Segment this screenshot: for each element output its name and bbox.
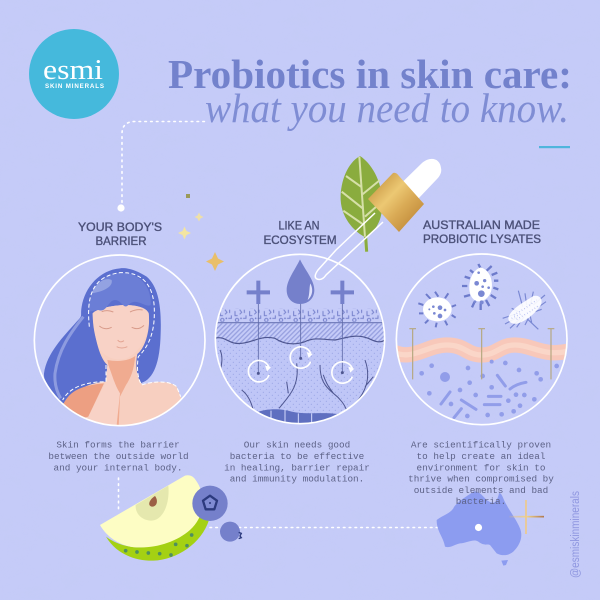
- rod bacteria: [441, 375, 526, 418]
- apple skin dots: [124, 533, 193, 557]
- small blueberry: [220, 522, 240, 542]
- text: barrier description: between the outside world: [48, 451, 189, 462]
- vertical lines: [258, 293, 342, 373]
- hand: [88, 364, 120, 424]
- text: ecosystem description: [224, 440, 370, 484]
- text: lysates description: bacteria.: [456, 496, 506, 507]
- circle outline: [396, 254, 567, 425]
- dropper glass tube: [315, 213, 383, 280]
- text: lysates description: environment for skin to: [417, 462, 545, 473]
- barrier dashes: [63, 273, 181, 400]
- headings: LIKE AN: [278, 220, 320, 232]
- headings: AUSTRALIAN MADE: [423, 219, 540, 232]
- text: lysates description: outside elements and bad: [414, 485, 548, 496]
- drop icon: [287, 259, 314, 304]
- social handle: @esmiskinminerals: [570, 491, 582, 578]
- connector: dotted line from apple to Australia: [118, 478, 478, 528]
- text: barrier description: Skin forms the barrier: [56, 440, 180, 450]
- title: [168, 51, 572, 131]
- ring arrows and nodes: [257, 352, 354, 375]
- fringe: [88, 273, 151, 312]
- leaf veins: [342, 157, 380, 252]
- icon: Australia map: [437, 491, 544, 566]
- text: barrier description: and your internal body.: [54, 462, 182, 473]
- title: what you need to know.: [205, 85, 569, 131]
- plus icons: [247, 281, 354, 304]
- panel: probiotic lysates: [390, 254, 573, 425]
- leaf stem: [366, 237, 367, 252]
- headings: BARRIER: [96, 235, 146, 248]
- hair: [44, 268, 161, 403]
- headings: PROBIOTIC LYSATES: [423, 233, 541, 246]
- skin: [84, 305, 182, 425]
- logo: esmi skin minerals: [29, 29, 119, 119]
- circle outline: [215, 254, 385, 424]
- shoulder shadow: [63, 383, 104, 420]
- large blueberry: [192, 486, 228, 521]
- bacterium 2: [462, 264, 498, 310]
- hatched layer: [215, 323, 385, 344]
- nerve branches: [220, 350, 373, 411]
- text: lysates description: [408, 440, 554, 507]
- dotted dermis: [218, 338, 384, 414]
- pins: [409, 329, 554, 379]
- wave line: [215, 336, 385, 344]
- logo: esmi skin minerals: SKIN MINERALS: [45, 83, 104, 90]
- small bacteria dots: [419, 360, 559, 418]
- headings: YOUR BODY'S: [78, 221, 162, 234]
- cells layer: [215, 308, 385, 322]
- bacterium 1: [418, 292, 456, 327]
- text: ecosystem description: and immunity modulation.: [230, 474, 364, 484]
- location marker: [475, 524, 482, 531]
- sparkles: [178, 194, 224, 271]
- text: ecosystem description: Our skin needs good: [244, 440, 350, 450]
- eyes and mouth: [99, 310, 144, 329]
- blueberry crown: [203, 496, 217, 509]
- text: lysates description: to help create an ideal: [417, 451, 546, 462]
- dropper bulb: [402, 159, 441, 203]
- text: lysates description: Are scientifically proven: [411, 440, 551, 450]
- apple seed: [149, 496, 157, 507]
- text: barrier description: [48, 440, 189, 473]
- Tasmania: [501, 560, 508, 566]
- logo: esmi skin minerals: esmi: [43, 54, 103, 86]
- skin wave: [390, 345, 573, 355]
- neck shadow: [107, 356, 135, 427]
- hair shine: [92, 279, 112, 293]
- dropper collar: [368, 173, 424, 232]
- bottom tissue: [258, 409, 338, 423]
- text: ecosystem description: in healing, barrier repair: [224, 462, 370, 473]
- hair highlight strand: [55, 317, 83, 398]
- face: [92, 305, 149, 344]
- bacterium 3: [503, 291, 546, 329]
- surface line: [218, 322, 382, 324]
- connector: dotted line from title to first column: [117, 122, 205, 212]
- headings: ECOSYSTEM: [264, 234, 336, 247]
- panel: woman, your body's barrier: [34, 255, 205, 430]
- gold sparkle: [509, 500, 544, 534]
- headings: [78, 219, 541, 248]
- panel: skin ecosystem: [212, 254, 388, 430]
- apple core: [136, 486, 169, 521]
- text: lysates description: thrive when compromised by: [408, 474, 554, 484]
- icon: dropper: [315, 159, 441, 280]
- drop highlight: [308, 283, 312, 300]
- title: Probiotics in skin care:: [168, 51, 572, 97]
- accent line: [539, 146, 570, 148]
- skin wave centre: [390, 345, 573, 355]
- rotation rings: [248, 347, 352, 383]
- leaf: [341, 156, 382, 252]
- icon: apple slice: [100, 475, 241, 561]
- text: ecosystem description: bacteria to be effective: [230, 451, 364, 462]
- circle outline: [34, 255, 205, 426]
